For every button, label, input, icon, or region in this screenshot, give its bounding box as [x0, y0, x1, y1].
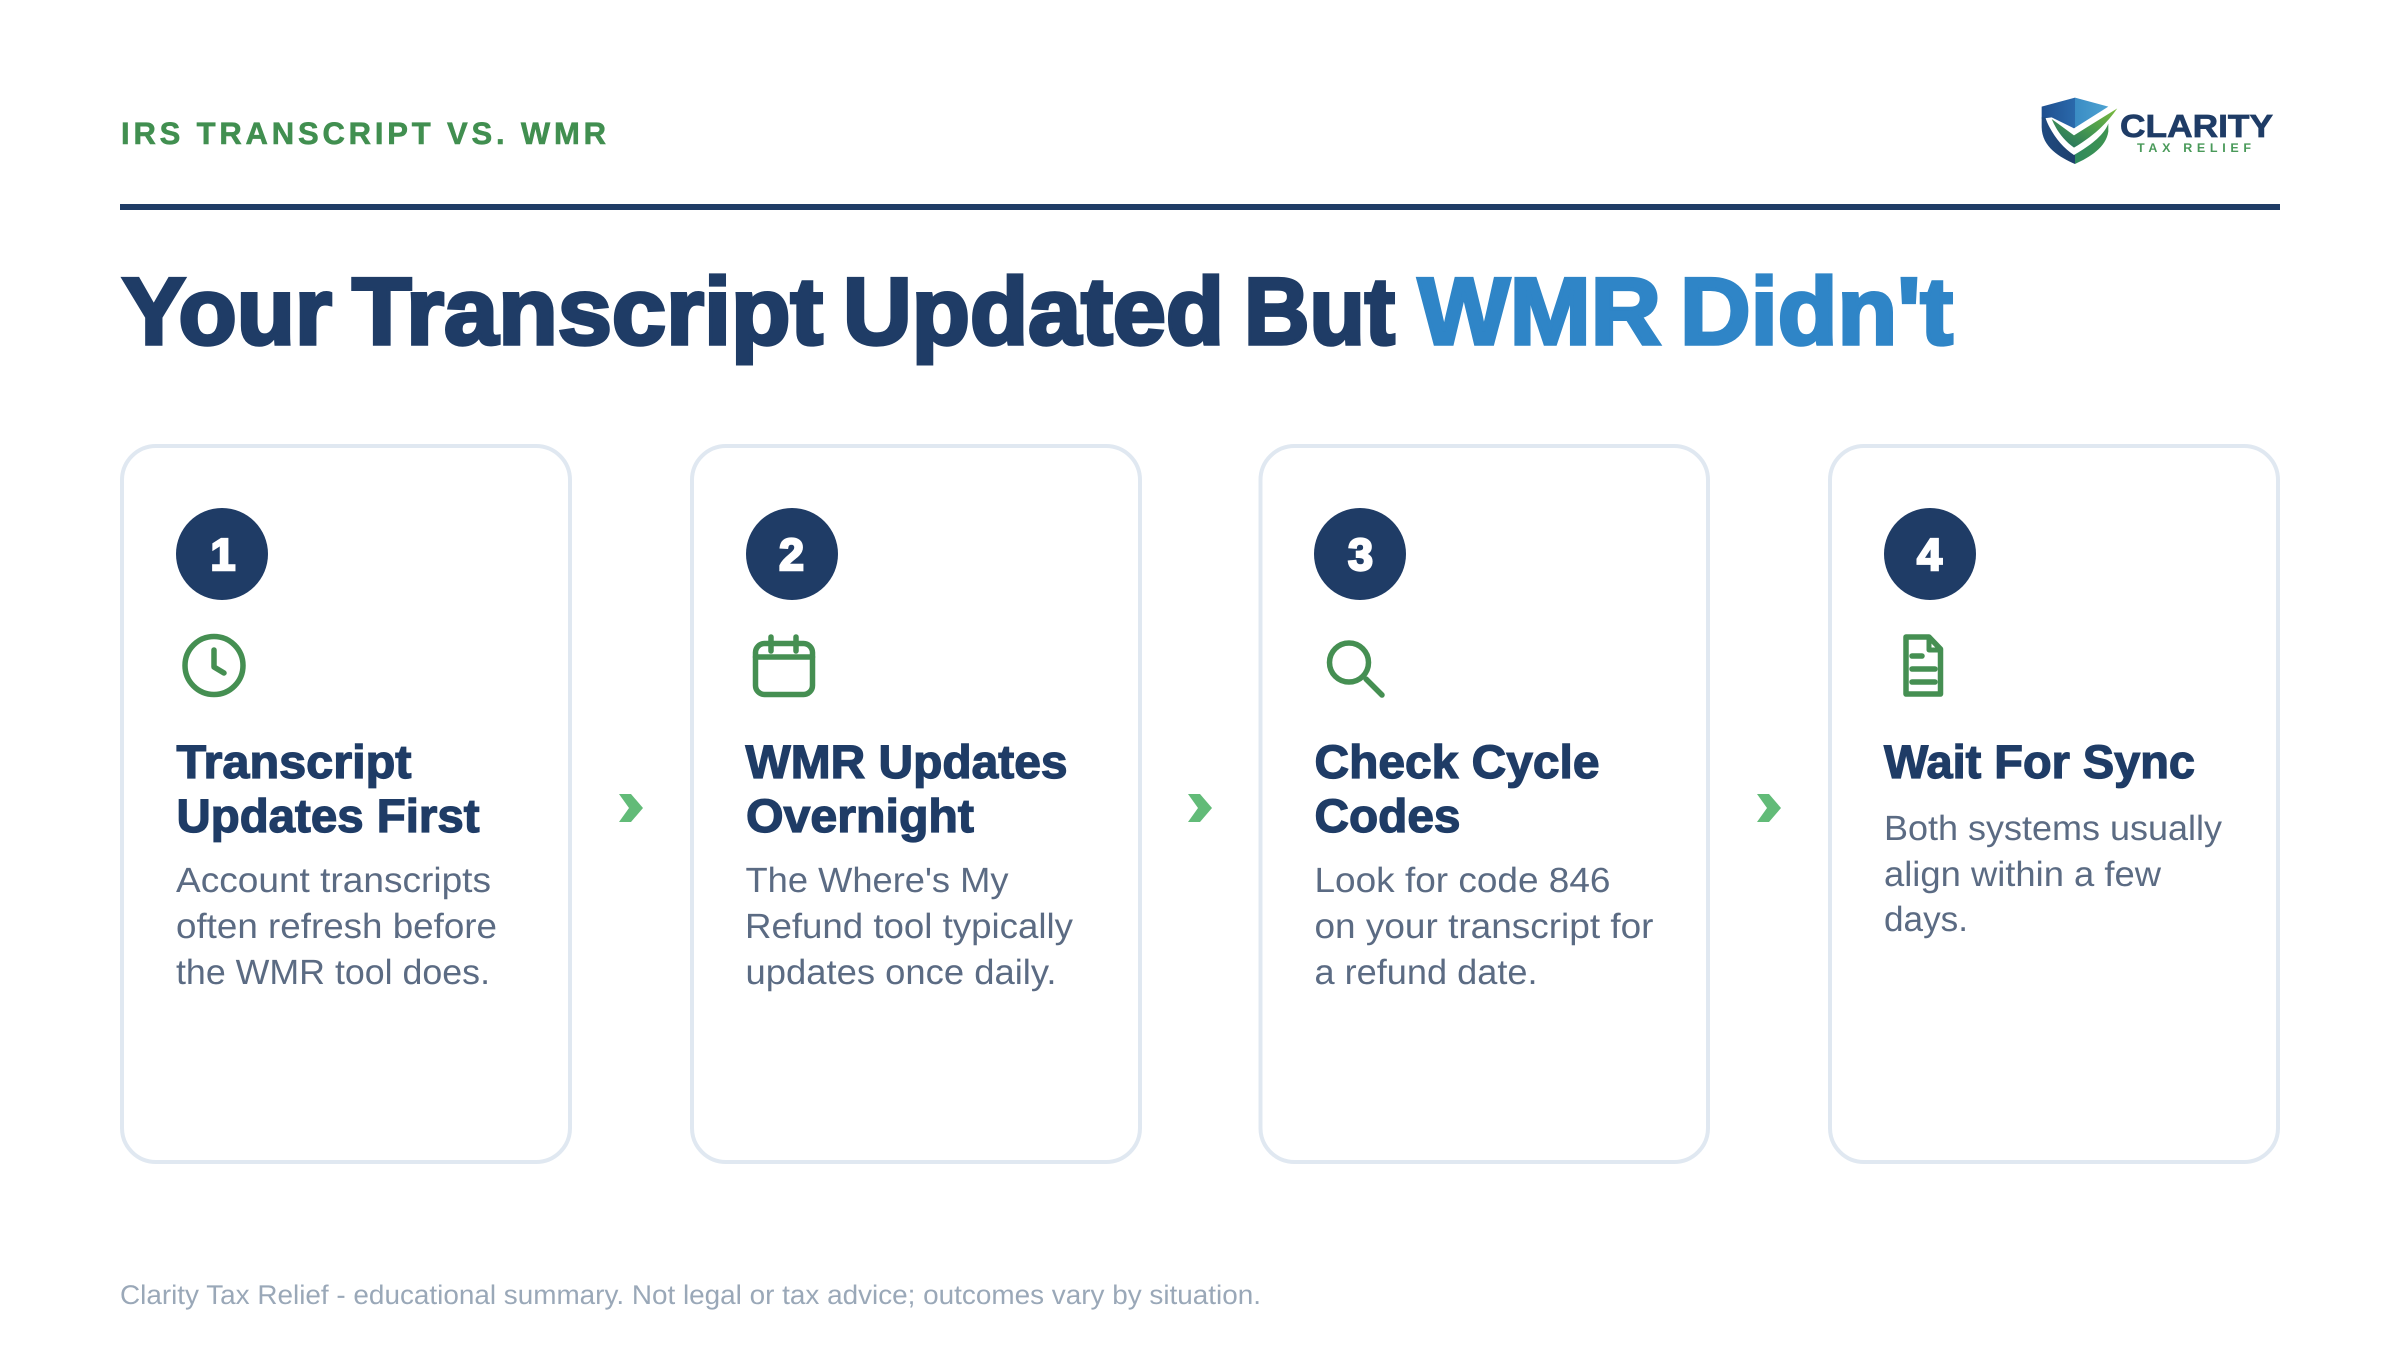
description: Look for code 846: [1314, 861, 1610, 900]
description: often refresh before: [176, 907, 497, 946]
heading: Codes: [1314, 789, 1460, 842]
heading: Check Cycle: [1314, 735, 1600, 788]
icon: clock: [185, 636, 243, 694]
description: [1314, 861, 1654, 992]
panel: step 4: [1830, 446, 2278, 1162]
description: the WMR tool does.: [176, 953, 490, 992]
step number 1: [176, 508, 268, 600]
step number 4: [1884, 508, 1976, 600]
title: WMR: [1418, 259, 1661, 365]
title: Updated: [843, 259, 1224, 365]
description: on your transcript for: [1314, 907, 1654, 946]
arrow: [1757, 794, 1781, 822]
footer disclaimer: Clarity Tax Relief - educational summary. Not legal or tax advice; outcomes vary by situation.: [120, 1280, 1261, 1310]
heading: [1314, 735, 1600, 842]
eyebrow label: IRS TRANSCRIPT VS. WMR: [121, 116, 606, 151]
arrow: [1188, 794, 1212, 822]
arrow: [619, 794, 643, 822]
step number 3: 3: [1348, 529, 1373, 580]
description: Refund tool typically: [745, 907, 1074, 946]
description: days.: [1884, 900, 1968, 939]
icon: shield with check: [2042, 98, 2117, 164]
icon: magnifier: [1330, 643, 1382, 695]
step number 2: 2: [779, 529, 804, 580]
description: align within a few: [1884, 855, 2162, 894]
icon: document: [1906, 637, 1940, 694]
heading: [746, 735, 1068, 842]
description: [1884, 809, 2223, 939]
heading: Updates First: [176, 789, 480, 842]
panel: step 3: [1260, 446, 1708, 1162]
title: Transcript: [352, 259, 823, 365]
panel: step 2: [692, 446, 1140, 1162]
panel: step 1: [122, 446, 570, 1162]
description: [176, 861, 497, 992]
step number 2: [746, 508, 838, 600]
step number 3: [1314, 508, 1406, 600]
icon: calendar: [756, 637, 812, 694]
heading: Transcript: [176, 735, 412, 788]
heading: Wait For Sync: [1884, 735, 2195, 788]
title: But: [1244, 259, 1395, 365]
title: Your: [122, 259, 332, 365]
description: Both systems usually: [1884, 809, 2223, 848]
title: [122, 259, 1953, 365]
title: Didn't: [1680, 259, 1953, 365]
description: updates once daily.: [746, 953, 1056, 992]
description: Account transcripts: [176, 861, 491, 900]
heading: WMR Updates: [746, 735, 1068, 788]
wordmark: CLARITY: [2120, 108, 2273, 144]
step number 4: 4: [1917, 529, 1942, 580]
heading: Overnight: [746, 789, 974, 842]
tagline: TAX RELIEF: [2137, 141, 2251, 155]
description: The Where's My: [746, 861, 1009, 900]
step number 1: 1: [210, 529, 236, 580]
description: a refund date.: [1314, 953, 1538, 992]
heading: [176, 735, 480, 842]
description: [745, 861, 1074, 992]
logo: Clarity Tax Relief: [2042, 98, 2273, 164]
